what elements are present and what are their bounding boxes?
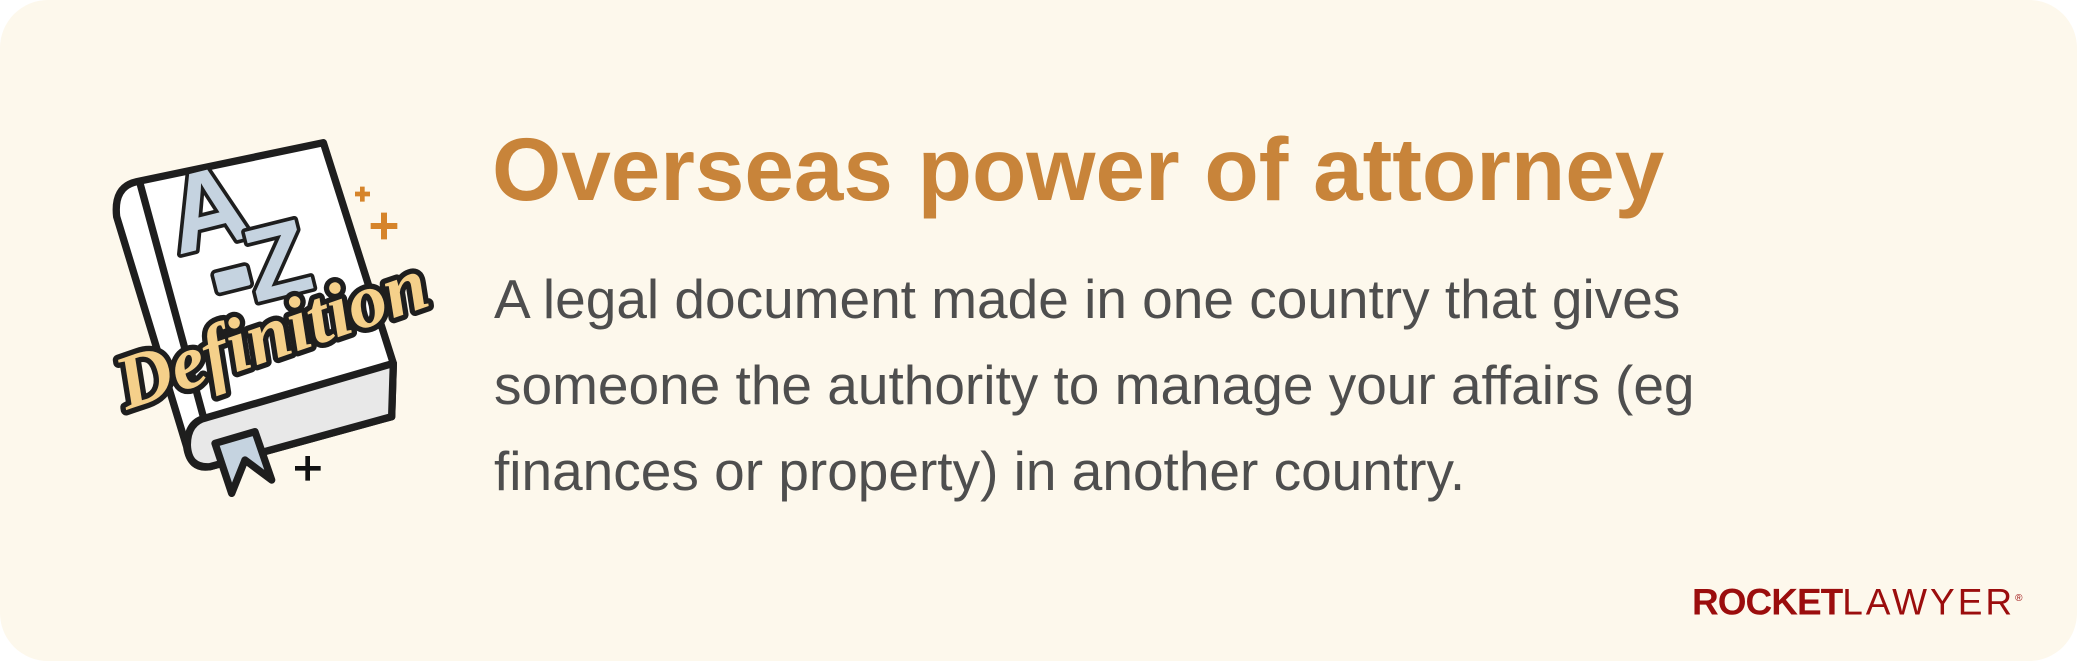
icon: definition book — [104, 139, 438, 497]
title: Overseas power of attorney — [492, 119, 1664, 219]
letters A-Z: A — [154, 140, 261, 278]
bookmark — [215, 432, 272, 493]
script text: Definition: Definition — [104, 240, 438, 426]
definition text: someone the authority to manage your affairs (eg — [494, 354, 1695, 416]
letters A-Z: Z — [232, 196, 322, 324]
book cover — [116, 143, 393, 467]
definition text — [494, 268, 1695, 502]
sparkles — [295, 187, 397, 481]
logo: Rocket Lawyer: ROCKETLAWYER® — [1692, 581, 2022, 622]
definition text: finances or property) in another country. — [494, 440, 1465, 502]
letters A-Z — [154, 128, 322, 339]
definition text: A legal document made in one country that gives — [494, 268, 1680, 330]
